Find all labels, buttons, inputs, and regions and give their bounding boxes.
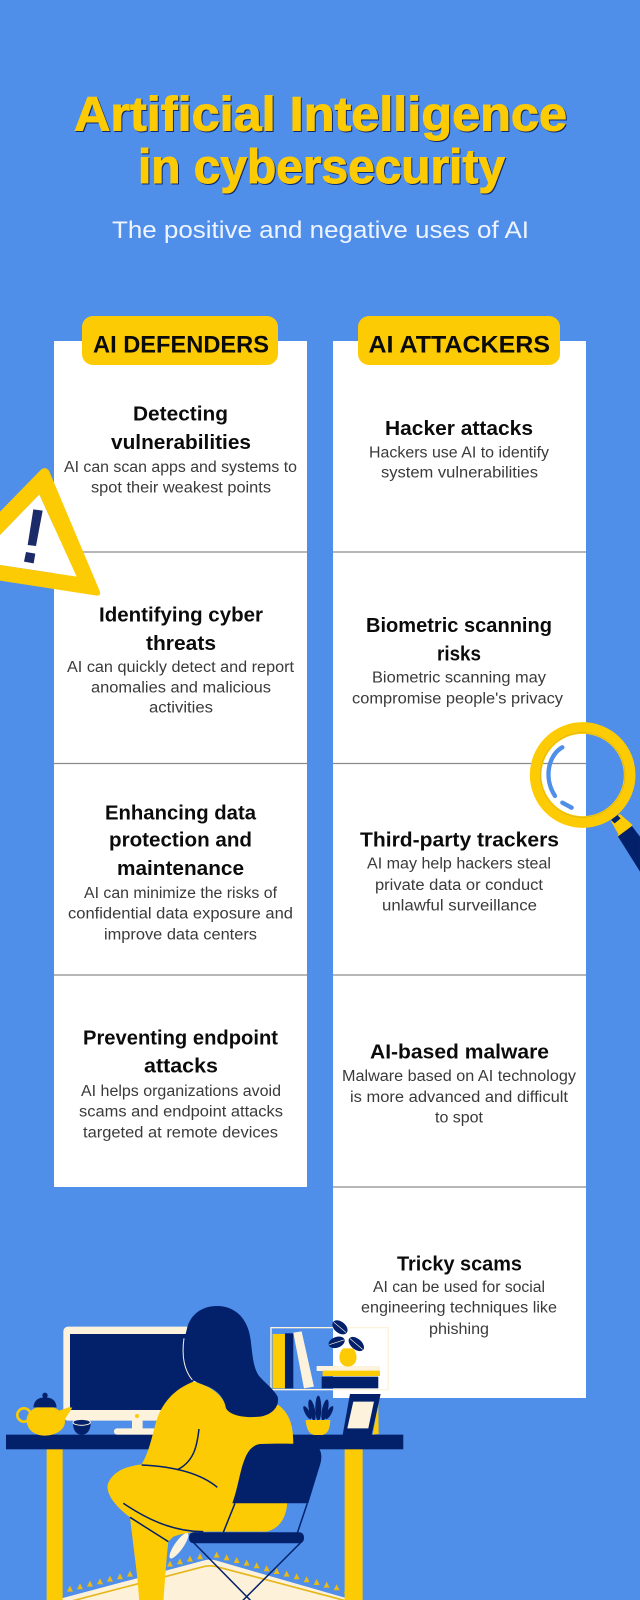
item: hacker attacks: Hackers use AI to identify: [369, 444, 549, 461]
item: identifying cyber threats: activities: [149, 700, 213, 717]
item: identifying cyber threats: AI can quickly detect and report: [67, 659, 295, 676]
item: AI-based malware: AI-based malware: [370, 1041, 549, 1063]
item: preventing endpoint attacks: targeted at remote devices: [83, 1124, 278, 1141]
item: detecting vulnerabilities: [64, 404, 297, 496]
item: preventing endpoint attacks: AI helps organizations avoid: [81, 1083, 281, 1100]
item: hacker attacks: system vulnerabilities: [381, 465, 538, 482]
item: tricky scams: phishing: [429, 1321, 489, 1338]
item: third-party trackers: AI may help hackers steal: [367, 856, 551, 873]
item: biometric scanning risks: risks: [437, 643, 481, 665]
heading pill: AI defenders: AI DEFENDERS: [93, 332, 269, 358]
item: biometric scanning risks: Biometric scanning: [366, 615, 552, 637]
icon: magnifying glass: [536, 728, 640, 872]
item: enhancing data protection: maintenance: [117, 858, 244, 880]
item: preventing endpoint attacks: [79, 1027, 283, 1141]
item: identifying cyber threats: anomalies and malicious: [91, 680, 271, 697]
teapot: [17, 1393, 72, 1436]
item: tricky scams: Tricky scams: [397, 1254, 522, 1276]
item: AI-based malware: is more advanced and difficult: [350, 1089, 569, 1106]
heading pill: AI attackers: AI ATTACKERS: [368, 332, 550, 358]
item: detecting vulnerabilities: spot their weakest points: [91, 479, 271, 496]
item: preventing endpoint attacks: attacks: [144, 1056, 218, 1078]
plant: [302, 1396, 335, 1435]
panel: AI attackers: [333, 316, 586, 1398]
item: identifying cyber threats: threats: [146, 633, 216, 655]
item: hacker attacks: [369, 418, 549, 482]
subtitle: The positive and negative uses of AI: [112, 217, 529, 244]
cup: [73, 1419, 91, 1435]
item: tricky scams: AI can be used for social: [373, 1279, 545, 1296]
monitor: [63, 1327, 197, 1435]
title: Artificial Intelligence: [74, 88, 567, 142]
desk: [6, 1435, 403, 1600]
heading pill: AI attackers: [358, 316, 560, 365]
heading pill: AI defenders: [82, 316, 278, 365]
item: identifying cyber threats: [67, 605, 295, 717]
item: detecting vulnerabilities: Detecting: [133, 404, 228, 426]
item: enhancing data protection: improve data centers: [104, 926, 257, 943]
item: enhancing data protection: protection and: [109, 830, 252, 852]
item: third-party trackers: private data or conduct: [375, 877, 544, 894]
item: third-party trackers: unlawful surveillance: [382, 898, 537, 915]
item: preventing endpoint attacks: Preventing endpoint: [83, 1027, 278, 1049]
item: biometric scanning risks: compromise people's privacy: [352, 690, 563, 707]
person: [108, 1306, 293, 1600]
chair: [189, 1444, 321, 1600]
item: enhancing data protection: Enhancing data: [105, 802, 257, 824]
photo frame: [343, 1394, 381, 1435]
item: AI-based malware: Malware based on AI technology: [342, 1068, 576, 1085]
item: third-party trackers: [360, 830, 559, 915]
item: enhancing data protection: confidential data exposure and: [68, 906, 293, 923]
item: tricky scams: engineering techniques like: [361, 1300, 557, 1317]
item: third-party trackers: Third-party trackers: [360, 830, 559, 852]
illustration: person at desk: [6, 1306, 403, 1600]
item: biometric scanning risks: Biometric scanning may: [372, 670, 546, 687]
item: AI-based malware: [342, 1041, 576, 1127]
rug: [37, 1552, 370, 1600]
item: enhancing data protection: [68, 802, 293, 943]
item: biometric scanning risks: [352, 615, 563, 707]
item: preventing endpoint attacks: scams and endpoint attacks: [79, 1104, 283, 1121]
title: [74, 88, 567, 194]
icon: warning triangle: [0, 468, 100, 596]
bookshelf: [271, 1317, 388, 1390]
item: hacker attacks: Hacker attacks: [385, 418, 533, 440]
item: tricky scams: [361, 1254, 557, 1338]
item: identifying cyber threats: Identifying cyber: [99, 605, 263, 627]
item: detecting vulnerabilities: AI can scan apps and systems to: [64, 459, 297, 476]
title: in cybersecurity: [138, 141, 505, 194]
item: detecting vulnerabilities: vulnerabilities: [111, 432, 251, 454]
item: AI-based malware: to spot: [435, 1110, 484, 1127]
item: enhancing data protection: AI can minimize the risks of: [84, 885, 278, 902]
panel: AI defenders: [54, 316, 307, 1187]
